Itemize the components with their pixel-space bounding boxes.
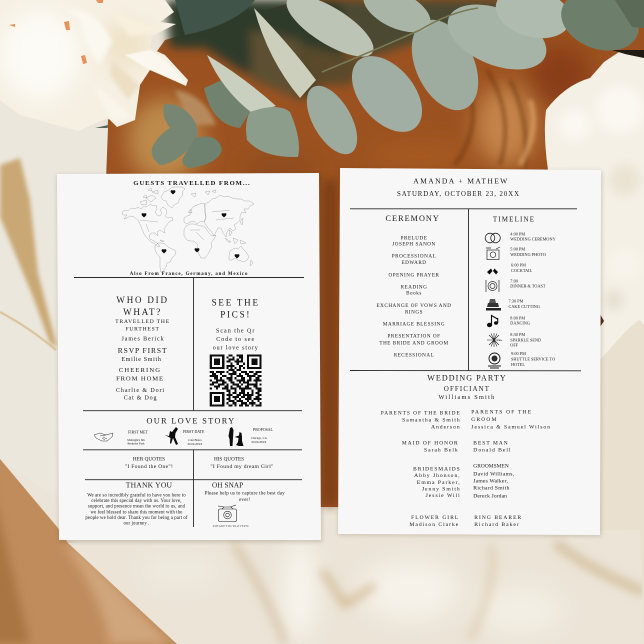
section: who did what: FROM HOME [116,376,164,383]
section: see the pics [210,298,262,405]
icon: dinner plate [486,280,499,292]
groomsmen: GROOMSMEN [473,463,509,469]
section: who did what: FURTHEST [125,326,160,332]
section: who did what: WHAT? [123,307,162,317]
quote: his quotes: HIS QUOTES [214,457,244,463]
bridesmaids: Emma Parker, [417,480,461,486]
first date [183,430,205,446]
sparkle send off time: 8:30 PM [510,332,525,337]
proposal [251,428,274,444]
wedding photo time: 5:00 PM [510,247,525,252]
section: our love story: OUR LOVE STORY [146,416,236,425]
quote: his quotes [210,457,274,470]
first met: Berkeley Park [127,442,145,446]
heading: couple names: AMANDA + MATHEW [413,176,509,185]
bridesmaids: BRIDESMAIDS [413,466,461,472]
column: ceremony: EXCHANGE OF VOWS AND [376,303,452,309]
oh snap block: Please help us to capture the best day [205,492,285,497]
heading: guests travelled from: GUESTS TRAVELLED FROM... [133,180,251,187]
column: ceremony [376,214,452,359]
cake cutting time: 7:30 PM [508,299,523,304]
groomsmen: Dereck Jordan [473,493,507,499]
best man: BEST MAN [473,440,509,446]
column: ceremony: PROCESSIONAL [392,254,436,260]
dinner time: DINNER & TOAST [510,283,546,288]
heading: wedding date: SATURDAY, OCTOBER 23, 20XX [397,191,520,198]
parents of the bride: Anderson [431,425,461,431]
parents of the groom [471,410,551,430]
column: ceremony: EDWARD [401,260,427,266]
proposal: Chicago, CA [251,436,268,441]
section: who did what: Cat & Dog [124,396,157,402]
section: see the pics: Code to see [216,337,255,343]
icon: proposal silhouette [228,427,244,446]
parents of the bride [381,411,461,431]
icon: cheers glasses [487,268,498,274]
wood tabletop [105,0,644,507]
proposal: 00.00.20XX [252,440,267,444]
column: ceremony: PRELUDE [401,235,427,241]
quote: her quotes: HER QUOTES [133,457,165,463]
sparkle send off time: OFF [510,343,519,348]
thank you block [85,480,188,526]
parents of the groom: Jessica & Samuel Wilson [471,424,551,430]
column: ceremony: CEREMONY [386,214,440,223]
flower girl: FLOWER GIRL [411,515,459,521]
dark foliage shadow [165,0,520,100]
column: ceremony: THE BRIDE AND GROOM [379,340,449,346]
first date: 00.00.20XX [188,442,203,446]
panel: left card, guests and love story [57,173,321,540]
shuttle time: 9:00 PM [511,351,526,356]
parents of the bride: Samantha & Smith [402,418,461,424]
wedding ceremony time: 4:00 PM [510,231,525,236]
cake cutting time: CAKE CUTTING [508,304,540,309]
maid of honor [402,440,459,453]
flower girl [409,515,459,528]
section: who did what: RSVP FIRST [118,346,167,355]
parents of the groom: GROOM [471,417,498,423]
thank you block: we feel blessed to share this moment with the [91,510,182,515]
column: ceremony: MARRIAGE BLESSING [383,321,445,327]
maid of honor: Sarah Belk [424,447,459,453]
section: who did what: WHO DID [116,295,169,305]
section: wedding party: WEDDING PARTY [427,374,507,382]
column: ceremony: RINGS [405,310,423,316]
right white flower [545,50,644,362]
first date: Cafe Bistro [188,438,202,442]
first met: FIRST MET [128,431,148,435]
thank you block: support, and presence mean the world to us, and [88,505,186,510]
first met [127,431,148,446]
groomsmen: David Williams, [473,471,515,477]
quote: his quotes: "I Found my dream Girl" [210,464,274,470]
section: our love story [94,416,274,446]
cocktail time: COCKTAIL [511,268,533,273]
column: timeline [485,216,556,368]
section: who did what: TRAVELLED THE [115,319,170,325]
card shadows [57,169,602,542]
section: see the pics: SEE THE [212,298,260,308]
icon: handshake [94,433,113,441]
groomsmen [473,463,515,499]
thank you block: celebrate this special day with us. Your love, [91,499,182,504]
column: ceremony: READING [401,284,427,290]
parents of the groom: PARENTS OF THE [471,410,532,416]
QR code [210,354,262,406]
wedding photo time: WEDDING PHOTO [510,252,546,257]
bridesmaids: Jessie Will [426,493,461,499]
bridesmaids: Jenny Smith [422,487,461,493]
section: who did what [115,295,170,402]
column: ceremony: Books [406,291,422,297]
groomsmen: Richard Smith [473,486,510,492]
first met: Midnight's 6th [127,438,145,442]
section: wedding party [381,374,551,528]
dancing time: 8:00 PM [510,315,525,320]
dancing time: DANCING [510,321,530,326]
wedding ceremony time: WEDDING CEREMONY [510,237,556,242]
thank you block: We are so incredibly grateful to have you here to [87,493,186,498]
best man: Donald Bell [473,447,512,453]
best man [473,440,512,453]
shuttle time: SHUTTLE SERVICE TO [511,356,555,361]
dinner time: 7:00 [510,278,518,283]
icon: dancing couple [165,427,178,445]
quote: her quotes [125,457,173,470]
first date: FIRST DATE [183,430,205,434]
quote: her quotes: "I Found the One"! [125,464,173,470]
section: wedding party: OFFICIANT [444,386,490,393]
note: other countries: Also From France, Germany, and Mexico [130,272,248,277]
parents of the bride: PARENTS OF THE BRIDE [381,411,461,417]
thank you block: people we hold dear. Thank you for being a part of [85,516,188,521]
cocktail time: 6:00 PM [511,263,526,268]
groomsmen: James Walker, [473,478,508,484]
icon: camera [486,247,500,260]
flower girl: Madison Clarke [409,522,459,528]
column: ceremony: RECESSIONAL [394,353,434,359]
cream peony flower [0,0,188,131]
leaves [78,0,644,168]
thank you block: our journey . [124,521,149,526]
ring bearer: RING BEARER [474,515,522,521]
icon: music note [487,316,498,327]
column: timeline: TIMELINE [493,216,535,224]
panel: right card, order of ceremony and wedding party [338,168,601,535]
section: see the pics: PICS! [220,310,251,320]
maid of honor: MAID OF HONOR [402,440,459,446]
bridesmaids [413,466,461,499]
shuttle time: HOTEL [511,362,525,367]
icon: wedding rings [485,233,500,243]
ring bearer [474,515,522,528]
section: who did what: Emilie Smith [121,357,162,363]
sparkle send off time: SPARKLE SEND [510,338,541,343]
column: ceremony: PRESENTATION OF [388,334,440,340]
section: who did what: Charlie & Dori [116,388,165,394]
section: wedding party: Williams Smith [439,394,495,401]
column: ceremony: OPENING PRAYER [389,272,440,278]
proposal: PROPOSAL [253,428,274,432]
icon: camera [218,505,236,522]
icon: sparkler [487,333,503,347]
bridesmaids: Abby Jhonson, [414,473,461,479]
oh snap block [205,481,285,528]
thank you block: THANK YOU [126,480,173,489]
section: see the pics: Scan the Qr [216,329,255,335]
icon: shuttle emblem [488,353,501,368]
column: ceremony: JOSEPH SANON [392,241,436,247]
icon: cake [486,299,501,310]
oh snap block: ever! [239,498,250,503]
oh snap block: OH SNAP [212,481,243,489]
section: see the pics: our love story [213,345,259,351]
section: who did what: James Berick [122,337,164,343]
section: who did what: CHEERING [119,367,161,374]
ring bearer: Richard Baker [474,522,520,528]
oh snap block: #SHAREYOURLOVEPIC [213,524,249,528]
world map with hearts [122,187,254,273]
